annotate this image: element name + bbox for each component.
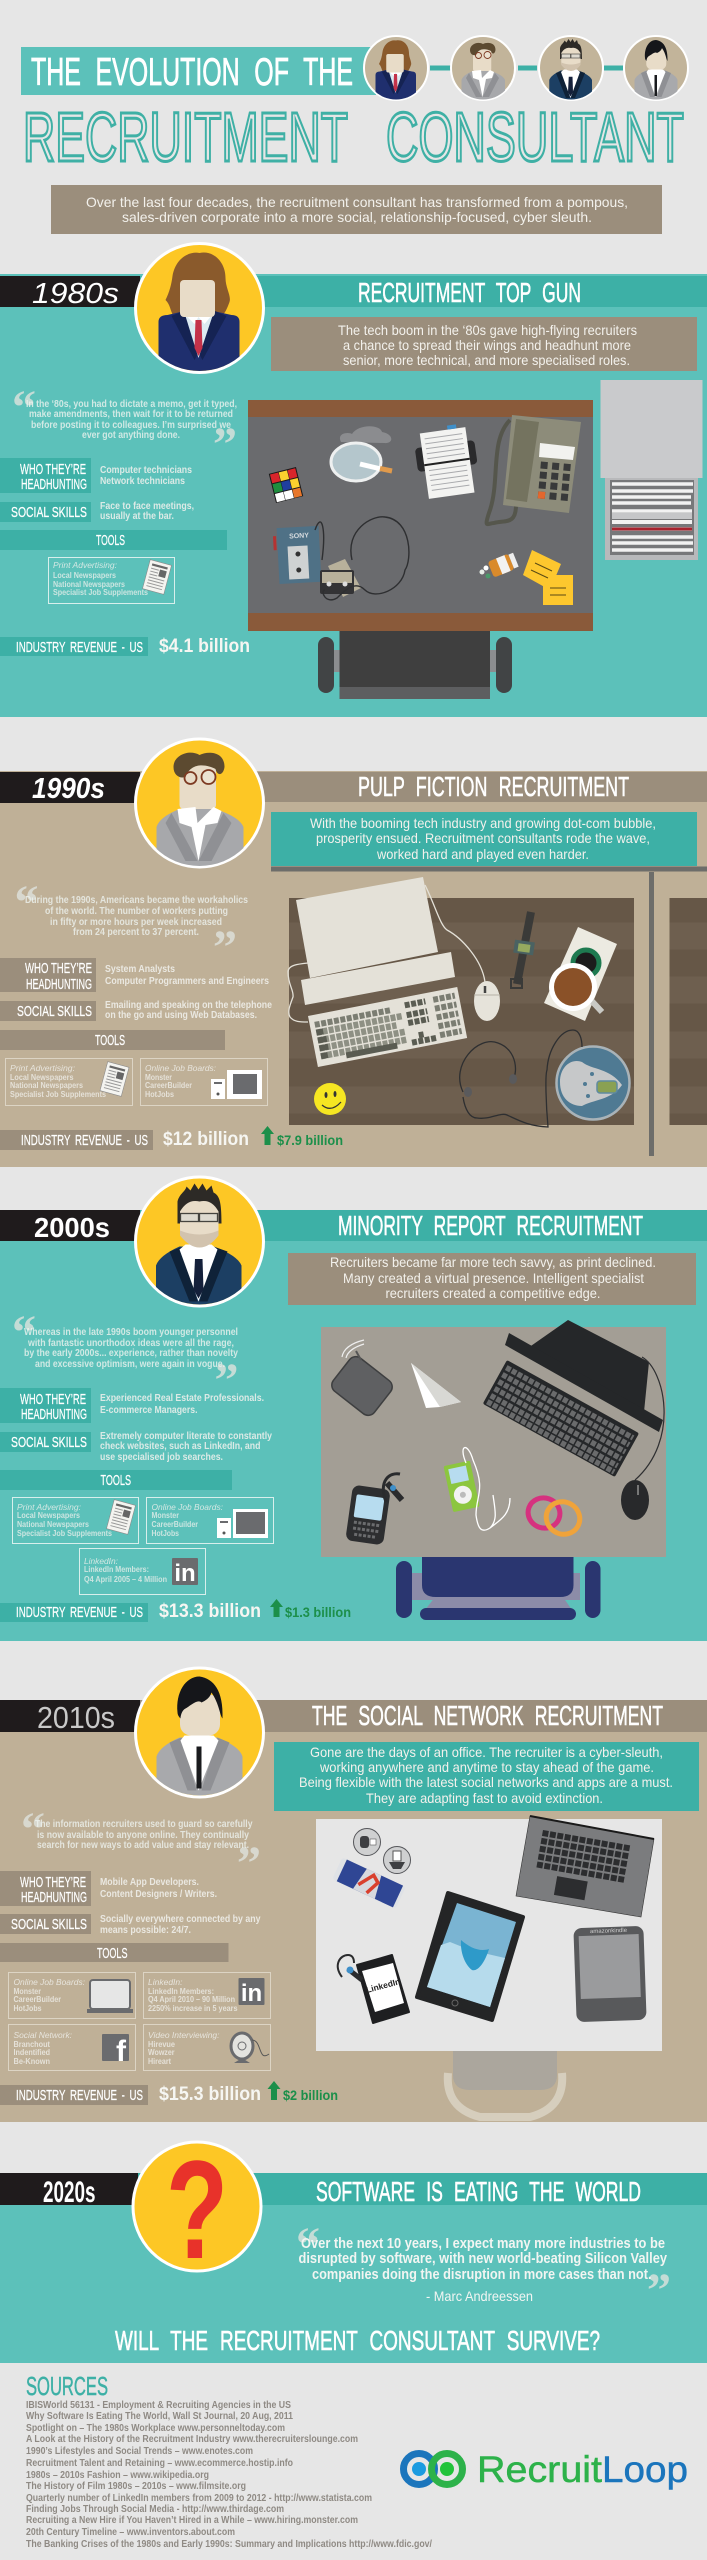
panel: 2010s bbox=[0, 1668, 707, 2122]
mouse and cable bbox=[621, 1357, 664, 1520]
tool: online job boards: CareerBuilder bbox=[145, 1081, 192, 1090]
wristbands bbox=[524, 1493, 586, 1540]
tool: online job boards bbox=[8, 1972, 136, 2018]
social skills: use specialised job searches. bbox=[100, 1451, 223, 1463]
heading: RECRUITMENT TOP GUN bbox=[358, 277, 581, 308]
portrait bbox=[136, 244, 264, 374]
who they're headhunting bbox=[0, 1871, 217, 1906]
who they're headhunting: WHO THEY’RE bbox=[20, 1391, 86, 1408]
quote: “ bbox=[12, 1306, 36, 1359]
paper plane bbox=[411, 1363, 461, 1408]
quote: “ bbox=[296, 2218, 320, 2271]
tool: video interviewing: Hirevue bbox=[148, 2040, 176, 2049]
monitor cable bbox=[288, 885, 485, 1022]
headphones and cable bbox=[315, 517, 409, 600]
description box bbox=[274, 1742, 699, 1811]
social skills: SOCIAL SKILLS bbox=[11, 1916, 87, 1933]
who they're headhunting: Computer technicians bbox=[100, 464, 192, 476]
tool: video interviewing bbox=[144, 2024, 270, 2070]
quote: from 24 percent to 37 percent. bbox=[73, 926, 199, 938]
tool: linkedin: LinkedIn Members: bbox=[84, 1565, 149, 1574]
sticky notes bbox=[523, 550, 573, 605]
connector lines bbox=[430, 66, 623, 70]
revenue bbox=[0, 1599, 351, 1622]
tools band: TOOLS bbox=[97, 1945, 128, 1962]
router bbox=[329, 1353, 395, 1419]
tool: social network: Social Network: bbox=[14, 2031, 72, 2040]
title band bbox=[135, 276, 707, 307]
revenue: $2 billion bbox=[283, 2087, 338, 2103]
tool: online job boards: CareerBuilder bbox=[14, 1995, 61, 2004]
description text: a chance to spread their wings and headhunt more bbox=[343, 337, 631, 353]
social skills bbox=[0, 500, 194, 522]
sources list: 20th Century Timeline – www.inventors.about.com bbox=[26, 2527, 235, 2538]
who they're headhunting: WHO THEY’RE bbox=[25, 960, 92, 977]
quote: of the world. The number of workers putting bbox=[45, 905, 228, 917]
who they're headhunting: WHO THEY’RE bbox=[20, 461, 86, 478]
sources bbox=[26, 2371, 688, 2550]
quote: disrupted by software, with new world-beating Silicon Valley bbox=[298, 2251, 667, 2267]
decade bar bbox=[0, 1210, 140, 1241]
revenue: INDUSTRY REVENUE - US bbox=[16, 639, 143, 656]
telephone bbox=[487, 415, 581, 524]
tool: linkedin: Q4 April 2005 – 4 Million bbox=[84, 1575, 167, 1584]
walkman bbox=[273, 526, 321, 584]
tool: linkedin: 2250% increase in 5 years bbox=[148, 2004, 238, 2013]
decade label: 2010s bbox=[37, 1700, 115, 1735]
quote: ” bbox=[213, 921, 237, 974]
revenue: INDUSTRY REVENUE - US bbox=[16, 2087, 143, 2104]
title bar bbox=[21, 47, 376, 95]
quote bbox=[21, 1803, 261, 1890]
tool: print advertising: National Newspapers bbox=[53, 580, 126, 589]
quote: The information recruiters used to guard so carefully bbox=[35, 1818, 253, 1830]
panel: 2020s bbox=[0, 2131, 707, 2363]
headphones and cable bbox=[460, 1030, 582, 1127]
desk bbox=[248, 400, 593, 631]
tools band bbox=[0, 1943, 228, 1962]
smiley bbox=[314, 1083, 346, 1115]
sources list: 1990’s Lifestyles and Social Trends – www.enotes.com bbox=[26, 2446, 253, 2457]
portrait bbox=[136, 1668, 264, 1798]
tool: online job boards: HotJobs bbox=[152, 1529, 180, 1538]
chair bbox=[448, 2051, 562, 2117]
smoke bbox=[340, 426, 391, 443]
quote bbox=[12, 381, 237, 471]
blackberry bbox=[345, 1485, 391, 1545]
tool: social network: Be-Known bbox=[14, 2057, 50, 2066]
social skills: usually at the bar. bbox=[100, 510, 174, 522]
tool: video interviewing: Wowzer bbox=[148, 2048, 174, 2057]
quote: - Marc Andreessen bbox=[426, 2288, 533, 2304]
chair bbox=[396, 1557, 600, 1620]
revenue: $7.9 billion bbox=[277, 1132, 343, 1148]
sources list: Finding Jobs Through Social Media - http://www.thirdage.com bbox=[26, 2504, 284, 2515]
keyboard bbox=[308, 987, 467, 1067]
tool: linkedin: LinkedIn: bbox=[84, 1557, 118, 1566]
quote: “ bbox=[14, 876, 38, 929]
keyboard bbox=[483, 1360, 639, 1477]
who they're headhunting: HEADHUNTING bbox=[21, 476, 87, 493]
title line one: THE EVOLUTION OF THE bbox=[31, 51, 353, 94]
sources list bbox=[26, 2400, 432, 2550]
ashtray bbox=[331, 443, 392, 481]
earphones bbox=[463, 1448, 510, 1530]
description box bbox=[271, 317, 697, 371]
description text: Being flexible with the latest social networks and apps are a must. bbox=[299, 1774, 673, 1790]
sources heading: SOURCES bbox=[26, 2371, 108, 2401]
avatar: 2000s bbox=[539, 36, 603, 101]
quote: ” bbox=[213, 418, 237, 471]
avatar: 2010s bbox=[624, 36, 688, 101]
tool: print advertising: National Newspapers bbox=[10, 1081, 84, 1090]
quote: ” bbox=[214, 1354, 238, 1407]
tool: online job boards: Online Job Boards: bbox=[145, 1064, 216, 1073]
tools band: TOOLS bbox=[96, 532, 125, 549]
tool: online job boards: Monster bbox=[14, 1987, 41, 1996]
tool: print advertising: Specialist Job Supplements bbox=[53, 588, 149, 597]
walkman: SONY bbox=[289, 532, 309, 540]
quote bbox=[12, 1306, 238, 1407]
bluetooth headset bbox=[383, 1474, 402, 1502]
revenue bbox=[0, 2081, 338, 2105]
logo: recruitloop: Loop bbox=[602, 2449, 688, 2490]
social skills: means possible: 24/7. bbox=[100, 1924, 191, 1936]
quote bbox=[14, 876, 248, 974]
tool: online job boards: Online Job Boards: bbox=[14, 1978, 85, 1987]
tool: print advertising bbox=[12, 1498, 138, 1544]
tool: video interviewing: Hireart bbox=[148, 2057, 171, 2066]
section background bbox=[0, 274, 707, 717]
description text: worked hard and played even harder. bbox=[376, 846, 589, 862]
sources list: Why Software Is Eating The World, Wall St Journal, 20 Aug, 2011 bbox=[26, 2411, 293, 2422]
tool: print advertising: Local Newspapers bbox=[53, 571, 117, 580]
intro box bbox=[51, 185, 662, 234]
revenue bbox=[0, 1126, 343, 1150]
tool: social network: Branchout bbox=[14, 2040, 50, 2049]
tool: print advertising bbox=[6, 1058, 132, 1106]
title band bbox=[135, 1700, 707, 1732]
title band bbox=[135, 1210, 707, 1241]
panel: 2000s bbox=[0, 1177, 707, 1641]
revenue: $4.1 billion bbox=[159, 636, 250, 657]
question mark circle: ? bbox=[166, 2131, 228, 2288]
portrait bbox=[136, 1177, 264, 1308]
who they're headhunting: Content Designers / Writers. bbox=[100, 1888, 217, 1900]
panel: 1990s bbox=[0, 739, 707, 1167]
sources list: Quarterly number of LinkedIn members from 2009 to 2012 - http://www.statista.com bbox=[26, 2493, 372, 2504]
sources list: Recruitment Talent and Retaining – www.ecommerce.hostip.info bbox=[26, 2458, 293, 2469]
energy drink can bbox=[332, 1857, 406, 1909]
monitor bbox=[505, 1320, 663, 1432]
who they're headhunting: WHO THEY’RE bbox=[20, 1874, 86, 1891]
description text: prosperity ensued. Recruitment consultants rode the wave, bbox=[316, 830, 650, 846]
cassettes bbox=[320, 559, 361, 597]
tools band: TOOLS bbox=[95, 1032, 125, 1049]
panel: 1980s bbox=[0, 244, 707, 717]
description text bbox=[330, 1254, 656, 1301]
quote: “ bbox=[12, 381, 36, 434]
social skills: SOCIAL SKILLS bbox=[11, 504, 87, 521]
tool: linkedin: Q4 April 2010 – 90 Million bbox=[148, 1995, 235, 2004]
smartphone bbox=[357, 1955, 409, 2023]
intro text: sales-driven corporate into a more social, relationship-focused, cyber sleuth. bbox=[122, 209, 592, 225]
description text: Recruiters became far more tech savvy, as print declined. bbox=[330, 1254, 656, 1270]
decade label: 1980s bbox=[32, 278, 119, 310]
decade label: 1990s bbox=[32, 773, 105, 805]
section background bbox=[0, 1700, 707, 2122]
social skills: Socially everywhere connected by any bbox=[100, 1913, 261, 1925]
rolodex bbox=[412, 422, 481, 500]
intro text bbox=[86, 194, 628, 225]
desk bbox=[321, 1320, 666, 1557]
revenue: $1.3 billion bbox=[285, 1604, 351, 1620]
who they're headhunting: HEADHUNTING bbox=[26, 976, 92, 993]
decade bar bbox=[0, 2173, 138, 2205]
social skills: SOCIAL SKILLS bbox=[11, 1434, 87, 1451]
who they're headhunting: HEADHUNTING bbox=[21, 1889, 87, 1906]
tools band bbox=[0, 1030, 225, 1050]
description text: They are adapting fast to avoid extinction. bbox=[366, 1790, 603, 1806]
revenue: INDUSTRY REVENUE - US bbox=[16, 1604, 143, 1621]
revenue: $15.3 billion bbox=[159, 2084, 261, 2105]
monitor bbox=[296, 877, 438, 978]
who they're headhunting bbox=[0, 1388, 264, 1423]
title word: recruitment: RECRUITMENT bbox=[23, 98, 348, 176]
filing cabinet bbox=[600, 380, 702, 560]
tool: linkedin: LinkedIn: bbox=[148, 1978, 182, 1987]
tool: online job boards: Online Job Boards: bbox=[152, 1503, 223, 1512]
sources list: Recruiting a New Hire if You Haven’t Hired in a While – www.hiring.monster.com bbox=[26, 2515, 358, 2526]
desk bbox=[316, 1816, 662, 2051]
tool: linkedin: LinkedIn Members: bbox=[148, 1987, 214, 1996]
who they're headhunting: Network technicians bbox=[100, 475, 185, 487]
who they're headhunting bbox=[0, 458, 192, 493]
header panel bbox=[21, 36, 688, 234]
coffee and napkin bbox=[544, 927, 617, 1021]
quote: in fifty or more hours per week increased bbox=[50, 916, 222, 928]
tool: social network: f bbox=[116, 2035, 127, 2068]
section background bbox=[0, 2205, 707, 2363]
who they're headhunting: Experienced Real Estate Professionals. bbox=[100, 1392, 264, 1404]
social skills bbox=[0, 1430, 272, 1463]
description text: With the booming tech industry and growing dot-com bubble, bbox=[310, 815, 656, 831]
logo: recruitloop bbox=[404, 2449, 688, 2490]
tool: online job boards bbox=[146, 1498, 274, 1544]
sources list: 1980s – 2010s Fashion – www.wikipedia.org bbox=[26, 2470, 209, 2481]
tablet bbox=[417, 1893, 523, 2020]
quote: ever got anything done. bbox=[82, 429, 180, 441]
revenue: $13.3 billion bbox=[159, 1601, 261, 1622]
social skills: Face to face meetings, bbox=[100, 500, 194, 512]
who they're headhunting bbox=[0, 958, 269, 993]
tool: print advertising: Specialist Job Supplements bbox=[17, 1529, 113, 1538]
tool: linkedin bbox=[144, 1972, 270, 2018]
quote: In the ‘80s, you had to dictate a memo, get it typed, bbox=[26, 398, 237, 410]
avatar: 1990s bbox=[451, 36, 515, 101]
tool: print advertising: Print Advertising: bbox=[10, 1064, 75, 1073]
who they're headhunting: Computer Programmers and Engineers bbox=[105, 975, 269, 987]
tool: print advertising: National Newspapers bbox=[17, 1520, 90, 1529]
revenue: $12 billion bbox=[163, 1129, 249, 1150]
tool: video interviewing: Video Interviewing: bbox=[148, 2031, 220, 2040]
tool: online job boards bbox=[140, 1058, 268, 1106]
pills bbox=[480, 552, 519, 578]
decade label: 2000s bbox=[34, 1212, 110, 1243]
social skills: Extremely computer literate to constantly bbox=[100, 1430, 272, 1442]
title band bbox=[135, 772, 707, 802]
tool: online job boards: Monster bbox=[145, 1073, 172, 1082]
social skills: SOCIAL SKILLS bbox=[17, 1003, 92, 1020]
sources list: A Look at the History of the Recruitment Industry www.therecruiterslounge.com bbox=[26, 2434, 358, 2445]
who they're headhunting: E-commerce Managers. bbox=[100, 1404, 198, 1416]
section background bbox=[0, 771, 707, 1167]
revenue bbox=[0, 636, 250, 657]
sources list: The Banking Crises of the 1980s and Early 1990s: Summary and Implications http://www.fdic.gov/ bbox=[26, 2539, 432, 2550]
quote: Over the next 10 years, I expect many more industries to be bbox=[301, 2236, 665, 2252]
quote bbox=[296, 2218, 671, 2317]
social skills bbox=[0, 999, 272, 1021]
revenue: INDUSTRY REVENUE - US bbox=[21, 1132, 148, 1149]
chair bbox=[318, 631, 512, 699]
title band bbox=[130, 2173, 707, 2205]
tool: online job boards: HotJobs bbox=[145, 1090, 175, 1099]
tool: online job boards: CareerBuilder bbox=[152, 1520, 198, 1529]
description box bbox=[271, 812, 697, 866]
portrait bbox=[136, 739, 264, 869]
quote: is now available to anyone online. They continually bbox=[37, 1829, 249, 1841]
avatar: 1980s bbox=[364, 36, 428, 101]
tool: online job boards: HotJobs bbox=[14, 2004, 42, 2013]
quote: with fantastic unorthodox ideas were all the rage, bbox=[27, 1337, 234, 1349]
kindle bbox=[573, 1926, 647, 2022]
quote: ” bbox=[237, 1837, 261, 1890]
logo: recruitloop: Recruit bbox=[477, 2449, 603, 2490]
decade bar bbox=[0, 772, 140, 803]
who they're headhunting: HEADHUNTING bbox=[21, 1406, 87, 1423]
tools band bbox=[0, 530, 227, 550]
tools band bbox=[0, 1470, 232, 1490]
laptop bbox=[516, 1816, 654, 1917]
smartphone: LinkedIn bbox=[365, 1976, 401, 1995]
tool: print advertising: Specialist Job Supplements bbox=[10, 1090, 107, 1099]
tool: print advertising bbox=[48, 558, 174, 604]
quote: before posting it to colleagues. I’m surprised we bbox=[31, 419, 231, 431]
tools band: TOOLS bbox=[100, 1472, 131, 1489]
tool: print advertising: Print Advertising: bbox=[53, 561, 117, 570]
tool: print advertising: Print Advertising: bbox=[17, 1503, 81, 1512]
mouse bbox=[474, 981, 500, 1021]
tool: print advertising: Local Newspapers bbox=[10, 1073, 74, 1082]
tool: print advertising: Local Newspapers bbox=[17, 1511, 81, 1520]
decade label: 2020s bbox=[43, 2176, 96, 2209]
who they're headhunting: Mobile App Developers. bbox=[100, 1876, 199, 1888]
tool: linkedin bbox=[80, 1548, 206, 1594]
ipod bbox=[444, 1461, 480, 1512]
wristwatch bbox=[511, 912, 535, 988]
quote: search for new ways to add value and stay relevant. bbox=[37, 1839, 249, 1851]
description text: Gone are the days of an office. The recruiter is a cyber-sleuth, bbox=[310, 1744, 663, 1760]
description text: senior, more technical, and more specialised roles. bbox=[343, 352, 630, 368]
kindle: amazonkindle bbox=[590, 1928, 628, 1935]
quote: and excessive optimism, were again in vogue. bbox=[35, 1358, 225, 1370]
description text: recruiters created a competitive edge. bbox=[386, 1285, 600, 1301]
description text: Many created a virtual presence. Intelligent specialist bbox=[343, 1270, 644, 1286]
description text bbox=[338, 322, 637, 368]
quote: companies doing the disruption in more cases than not. bbox=[312, 2267, 652, 2283]
quote: by the early 2000s... experience, rather than novelty bbox=[24, 1347, 238, 1359]
description text: working anywhere and anytime to stay ahead of the game. bbox=[319, 1759, 654, 1775]
quote: Whereas in the late 1990s boom younger personnel bbox=[24, 1326, 238, 1338]
cd player bbox=[556, 1046, 630, 1120]
tool: social network bbox=[8, 2024, 136, 2070]
section background bbox=[0, 1210, 707, 1641]
quote: ” bbox=[647, 2264, 671, 2317]
quote: “ bbox=[21, 1803, 45, 1856]
sources list: Spotlight on – The 1980s Workplace www.personneltoday.com bbox=[26, 2423, 285, 2434]
who they're headhunting: System Analysts bbox=[105, 963, 175, 975]
question mark circle bbox=[133, 2131, 261, 2288]
social skills: Emailing and speaking on the telephone bbox=[105, 999, 272, 1011]
usb icons bbox=[354, 1828, 410, 1874]
sources list: IBISWorld 56131 - Employment & Recruiting Agencies in the US bbox=[26, 2400, 291, 2411]
decade bar bbox=[0, 276, 140, 307]
tool: social network: Indentified bbox=[14, 2048, 50, 2057]
desk bbox=[288, 877, 707, 1127]
social skills: on the go and using Web Databases. bbox=[105, 1009, 257, 1021]
description text bbox=[310, 815, 656, 862]
sources list: The History of Film 1980s – 2010s – www.filmsite.org bbox=[26, 2481, 246, 2492]
social skills bbox=[0, 1913, 261, 1936]
shelf rail bbox=[271, 869, 707, 1156]
quote: make amendments, then wait for it to be returned bbox=[29, 408, 233, 420]
description text bbox=[299, 1744, 673, 1806]
quote: During the 1990s, Americans became the workaholics bbox=[25, 894, 248, 906]
description text: The tech boom in the ‘80s gave high-flying recruiters bbox=[338, 322, 637, 338]
decade bar bbox=[0, 1700, 140, 1732]
intro text: Over the last four decades, the recruitment consultant has transformed from a pompous, bbox=[86, 194, 628, 210]
bluetooth headset bbox=[338, 1955, 362, 1980]
tool: online job boards: Monster bbox=[152, 1511, 179, 1520]
social skills: check websites, such as LinkedIn, and bbox=[100, 1440, 260, 1452]
rubik's cube bbox=[269, 467, 303, 503]
description box bbox=[288, 1253, 696, 1305]
